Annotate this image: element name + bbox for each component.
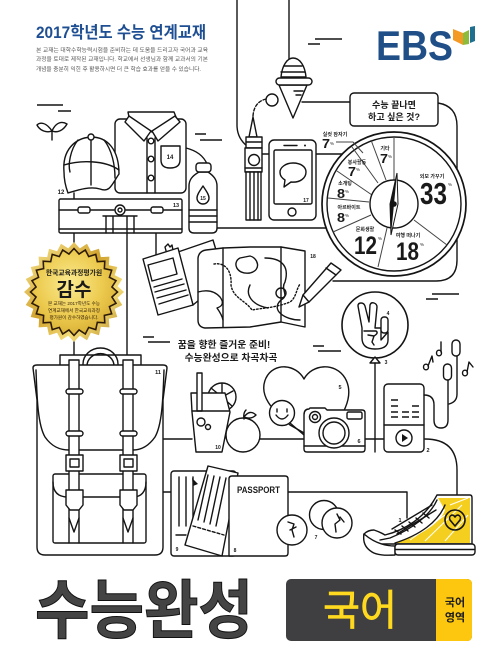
icon: shirt <box>115 112 186 193</box>
chart label: 8% part-time: 아르바이트 <box>337 204 361 211</box>
intro text block: 개념을 충분히 익힌 후 활용하시면 더 큰 학습 효과를 얻을 수 있습니다. <box>36 65 201 73</box>
icon: sprout <box>37 122 67 140</box>
icon: passport: PASSPORT <box>237 485 280 496</box>
icon: backpack <box>33 348 167 555</box>
icon: music notes <box>424 342 473 376</box>
icon: pencil <box>299 263 341 307</box>
icon: coins <box>277 500 352 545</box>
icon: smiley <box>270 400 304 435</box>
icon: balloon with victory hand: 4 <box>387 311 390 317</box>
subject name: 국어 <box>323 587 397 634</box>
chart label: 7% sleep: 7 <box>322 136 330 151</box>
icon: smartphone <box>269 140 316 220</box>
icon: music player with earphones <box>384 340 460 454</box>
chart label: 18% travel: 여행 떠나기 <box>396 232 421 239</box>
chart label: 7% other: 기타 <box>380 145 390 152</box>
chart label: 8% blind date <box>337 180 352 201</box>
intro text block: 본 교재는 대학수학능력시험을 준비하는 데 도움을 드리고자 국어과 교육 <box>36 46 208 54</box>
compass chart <box>322 131 466 276</box>
seal: supervision badge: 감수 <box>57 279 91 301</box>
speed lines <box>37 39 459 351</box>
icon: sneaker: 1 <box>398 518 402 524</box>
icon: sneaker <box>364 495 475 555</box>
seal: supervision badge: 본 교재는 2017학년도 수능 <box>48 300 100 307</box>
icon: heart <box>264 367 349 442</box>
icon: big ben <box>245 117 262 220</box>
icon: suitcase <box>59 199 182 233</box>
icon: suitcase: 13 <box>173 203 179 209</box>
title: 2017학년도 수능 연계교재 <box>36 23 206 42</box>
chart label: 8% part-time <box>337 204 361 225</box>
chart label: 7% volunteering: 7 <box>348 164 356 179</box>
compass needle <box>390 173 398 235</box>
tagline <box>178 338 277 364</box>
callout: question: 하고 싶은 것? <box>368 111 420 122</box>
chart label: 12% culture: % <box>378 236 382 241</box>
chart label: 8% blind date: 8 <box>337 186 345 201</box>
seal: supervision badge: 한국교육과정평가원 <box>46 268 102 277</box>
icon: shirt: 14 <box>167 155 174 161</box>
tagline: 꿈을 향한 즐거운 준비! <box>178 338 270 351</box>
chart label: 8% blind date: % <box>345 189 349 194</box>
subject area tag <box>445 596 465 624</box>
icon: balloon charm with dotted string <box>253 94 278 116</box>
chart label: 8% blind date: 소개팅 <box>338 180 352 187</box>
seal: supervision badge <box>24 242 124 342</box>
icon: drink <box>191 373 236 452</box>
icon: balloon with victory hand <box>342 292 408 452</box>
subject area tag: 국어 <box>445 596 465 609</box>
icon: balloon with victory hand: 3 <box>385 360 388 366</box>
panel: subject label <box>286 579 472 641</box>
icon: camera: 6 <box>357 439 361 445</box>
chart label: 8% part-time: % <box>345 213 349 218</box>
main title: 수능완성 <box>35 575 253 647</box>
chart label: 12% culture: 문화생활 <box>356 226 375 233</box>
icon: ticket: 9 <box>176 547 179 553</box>
EBS logo: EBS <box>376 22 453 69</box>
icon: water bottle: 15 <box>200 196 206 202</box>
icon: apple <box>226 410 260 452</box>
chart label: 12% culture: 12 <box>354 232 377 260</box>
chart label: 7% volunteering <box>348 159 367 179</box>
icon: ticket <box>171 471 236 556</box>
icon: cap <box>58 134 119 199</box>
icon: passport <box>229 476 288 556</box>
chart label: 7% sleep: 실컷 잠자기 <box>323 131 348 138</box>
chart label: 8% part-time: 8 <box>337 210 345 225</box>
chart label: 7% other: 7 <box>380 151 388 166</box>
icon: smartphone: 17 <box>303 198 309 204</box>
icon: music player with earphones: 2 <box>426 448 430 454</box>
icon: drink: 10 <box>215 445 221 451</box>
icon: water bottle <box>189 163 217 233</box>
icon: backpack: 11 <box>155 370 161 376</box>
icon: camera <box>304 408 365 452</box>
icon: cap: 12 <box>58 190 65 196</box>
icon: map: 18 <box>310 254 316 260</box>
chart label: 7% sleep <box>322 131 348 151</box>
chart label: 33% appearance: 외모 가꾸기 <box>420 173 445 180</box>
chart label: 18% travel: 18 <box>396 238 419 266</box>
icon: coins: 7 <box>315 535 318 541</box>
connecting wires <box>74 0 457 518</box>
subject area tag: 영역 <box>445 611 465 624</box>
icon: ice cream <box>276 58 312 118</box>
chart label: 7% other: % <box>388 154 392 159</box>
chart label: 7% sleep: % <box>330 141 334 146</box>
chart label: 18% travel: % <box>420 242 424 247</box>
intro text block: 과정을 토대로 제작된 교재입니다. 학교에서 선생님과 함께 교과서의 기본 <box>36 55 208 63</box>
callout: question <box>350 93 438 126</box>
icon: boarding pass <box>185 466 238 556</box>
callout: question: 수능 끝나면 <box>372 99 416 110</box>
icon: heart: 5 <box>338 385 342 391</box>
icon: passport: 8 <box>234 548 237 554</box>
icon: notebook <box>143 240 216 315</box>
chart label: 7% volunteering: 봉사활동 <box>348 159 367 166</box>
seal: supervision badge: 연계교재에서 한국교육과정 <box>48 307 100 314</box>
chart label: 7% volunteering: % <box>356 167 360 172</box>
chart label: 33% appearance: 33 <box>420 176 447 211</box>
chart label: 7% other <box>380 145 392 166</box>
seal: supervision badge: 평가원이 감수하였습니다. <box>49 314 99 321</box>
chart label: 33% appearance: % <box>448 182 452 187</box>
tagline: 수능완성으로 차곡차곡 <box>185 351 277 364</box>
icon: map <box>198 247 316 328</box>
intro text block <box>36 46 208 73</box>
